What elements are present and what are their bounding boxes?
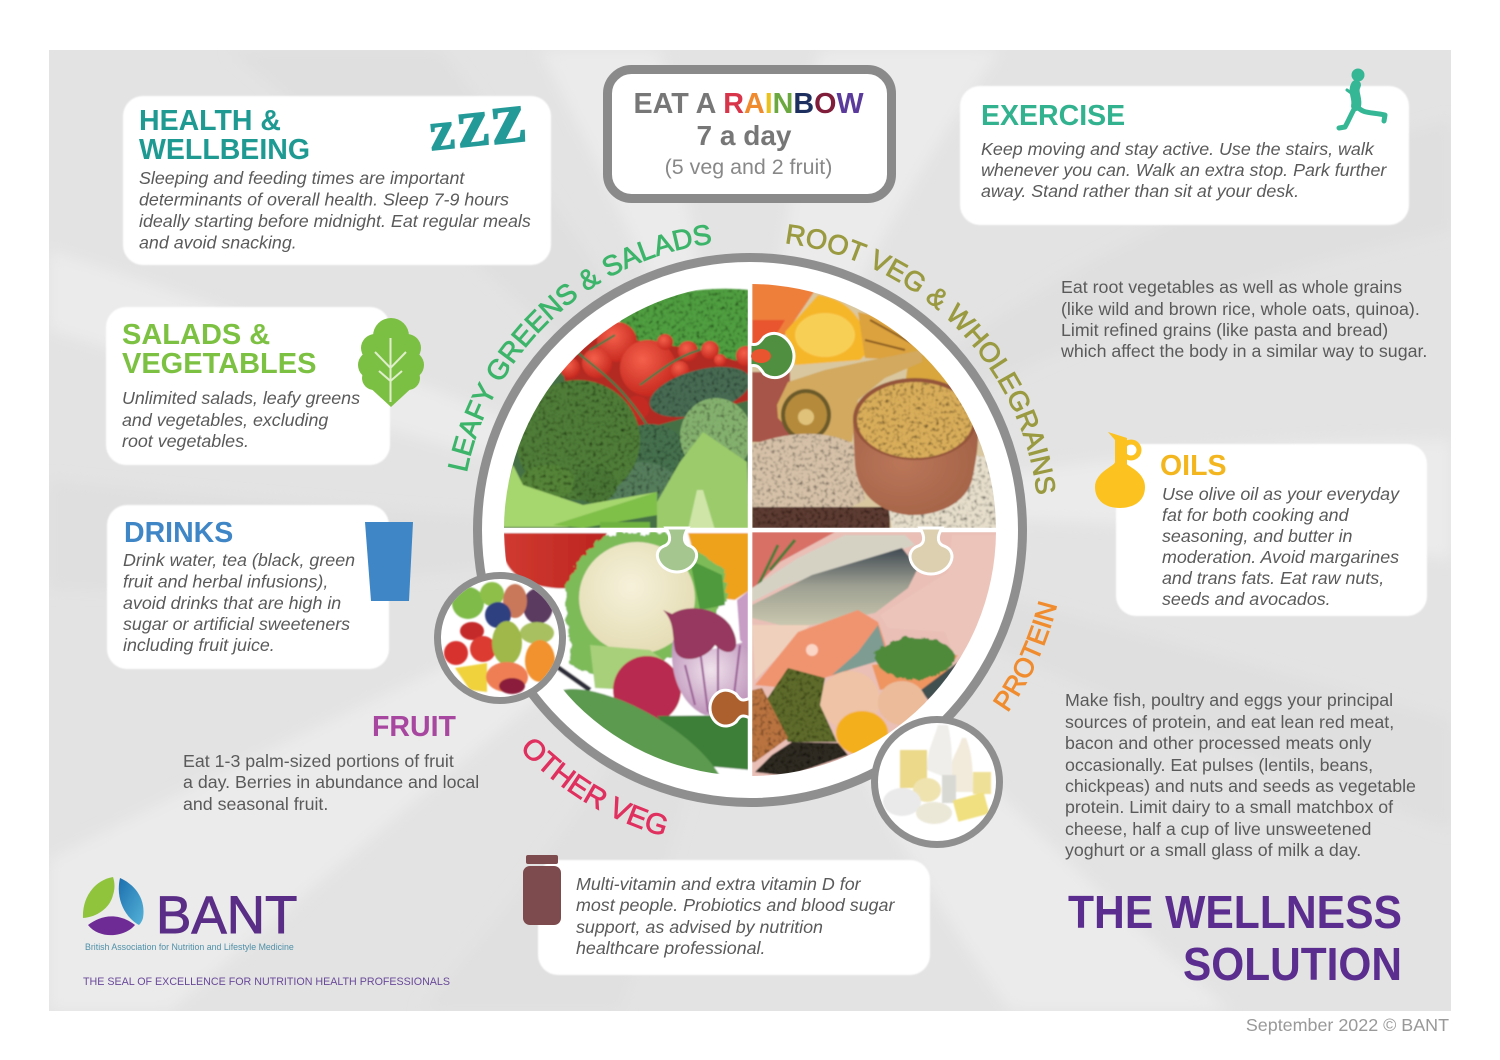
text: supplement advice: Multi-vitamin and extra vitamin D for xyxy=(576,874,862,894)
text: root vegetables advice: Eat root vegetables as well as whole grains xyxy=(1061,277,1402,297)
text: protein advice: occasionally. Eat pulses (lentils, beans, xyxy=(1065,755,1373,775)
text: sleep advice: Sleeping and feeding times are important xyxy=(139,168,465,188)
quadrant: other veg xyxy=(500,530,750,780)
panel: drinks xyxy=(107,505,413,669)
curved label: root veg and wholegrains: ROOT VEG & WHOLEGRAINS xyxy=(786,224,1056,494)
text: oils advice: Use olive oil as your everyday xyxy=(1162,484,1400,504)
text: oils advice: and trans fats. Eat raw nuts, xyxy=(1162,568,1384,588)
text: drinks advice: Drink water, tea (black, green xyxy=(123,550,355,570)
text: sleep advice: determinants of overall health. Sleep 7-9 hours xyxy=(139,190,509,210)
text: oils advice: moderation. Avoid margarines xyxy=(1162,547,1399,567)
icon: supplement bottle xyxy=(523,855,561,925)
icon: sleeping zzz: Z xyxy=(428,115,457,159)
text: exercise advice: Keep moving and stay active. Use the stairs, walk xyxy=(981,139,1375,159)
text: seal of excellence: THE SEAL OF EXCELLENCE FOR NUTRITION HEALTH PROFESSIONALS xyxy=(83,976,450,988)
curved label: other veg: OTHER VEG xyxy=(524,739,667,834)
icon: three leaf emblem xyxy=(83,877,144,935)
text: protein advice: Make fish, poultry and eggs your principal xyxy=(1065,690,1393,710)
text: supplement advice: most people. Probiotics and blood sugar xyxy=(576,895,895,915)
text: protein advice: bacon and other processed meats only xyxy=(1065,733,1372,753)
title: the wellness solution xyxy=(1068,886,1402,990)
text: exercise advice: whenever you can. Walk an extra stop. Park further xyxy=(981,160,1387,180)
heading: 7 a day: 7 a day xyxy=(697,120,792,151)
text: veg and fruit split: (5 veg and 2 fruit) xyxy=(665,155,832,179)
icon: sleeping zzz xyxy=(428,96,529,159)
text: supplement advice: healthcare professional. xyxy=(576,938,765,958)
text: root vegetables advice: Limit refined grains (like pasta and bread) xyxy=(1061,320,1388,340)
text: drinks advice: including fruit juice. xyxy=(123,635,275,655)
text: salads advice: and vegetables, excluding xyxy=(122,410,328,430)
text: oils advice: seasoning, and butter in xyxy=(1162,526,1353,546)
heading: salads and vegetables: VEGETABLES xyxy=(122,348,316,380)
tab: other veg jigsaw piece xyxy=(657,528,697,572)
icon: leaf xyxy=(358,318,424,407)
text: root vegetables advice: (like wild and brown rice, whole oats, quinoa). xyxy=(1061,299,1420,319)
panel: salads and vegetables xyxy=(106,307,424,465)
heading: eat a rainbow: EAT A RAINBOW xyxy=(633,88,864,120)
jigsaw dividers xyxy=(503,282,997,778)
text: fruit advice: Eat 1-3 palm-sized portions of fruit xyxy=(183,751,454,771)
heading: salads and vegetables: SALADS & xyxy=(122,319,270,351)
text: protein advice: chickpeas) and nuts and seeds as vegetable xyxy=(1065,776,1416,796)
tab: wholegrain jigsaw piece xyxy=(910,528,952,574)
heading: oils: OILS xyxy=(1160,450,1227,482)
text: protein advice: cheese, half a cup of live unsweetened xyxy=(1065,819,1371,839)
tab: leafy jigsaw piece xyxy=(750,333,794,378)
text: exercise advice: away. Stand rather than sit at your desk. xyxy=(981,181,1299,201)
text: fruit advice: and seasonal fruit. xyxy=(183,794,328,814)
heading: health and wellbeing: WELLBEING xyxy=(139,134,310,166)
chart: food plate xyxy=(478,258,1022,802)
quadrant: root veg and wholegrains xyxy=(750,280,1002,530)
dairy circle xyxy=(874,720,1000,844)
panel: health and wellbeing xyxy=(123,96,551,265)
icon: glass of water xyxy=(365,522,413,601)
text: drinks advice: sugar or artificial sweeteners xyxy=(123,614,350,634)
heading: exercise: EXERCISE xyxy=(981,100,1125,132)
text: protein advice: sources of protein, and eat lean red meat, xyxy=(1065,712,1394,732)
text: sleep advice: ideally starting before midnight. Eat regular meals xyxy=(139,211,531,231)
text: drinks advice: fruit and herbal infusions), xyxy=(123,572,328,592)
text: date and copyright: September 2022 © BANT xyxy=(1246,1015,1449,1035)
quadrant: protein xyxy=(745,530,1002,782)
logo: BANT xyxy=(83,877,297,952)
text: root vegetables advice: which affect the body in a similar way to sugar. xyxy=(1060,341,1427,361)
title: the wellness solution: THE WELLNESS xyxy=(1068,886,1402,938)
text: salads advice: Unlimited salads, leafy greens xyxy=(122,388,360,408)
curved label: protein: PROTEIN xyxy=(992,601,1058,712)
text: BANT wordmark: BANT xyxy=(156,886,297,945)
curved label: leafy greens and salads: LEAFY GREENS & SALADS xyxy=(448,224,711,472)
tab: lentil jigsaw piece xyxy=(710,690,750,726)
text: supplement advice: support, as advised by nutrition xyxy=(576,917,823,937)
panel: exercise xyxy=(960,68,1409,225)
heading: drinks: DRINKS xyxy=(124,517,233,549)
icon: runner xyxy=(1339,68,1385,128)
text: oils advice: seeds and avocados. xyxy=(1162,589,1331,609)
text: protein advice: yoghurt or a small glass of milk a day. xyxy=(1065,840,1361,860)
text: salads advice: root vegetables. xyxy=(122,431,249,451)
panel: supplements xyxy=(523,855,930,975)
text: oils advice: fat for both cooking and xyxy=(1162,505,1350,525)
text: fruit advice: a day. Berries in abundance and local xyxy=(183,772,479,792)
callout: eat a rainbow xyxy=(608,70,892,198)
text: sleep advice: and avoid snacking. xyxy=(139,232,297,252)
fruit circle xyxy=(438,576,562,700)
icon: sleeping zzz: Z xyxy=(488,96,529,156)
heading: fruit: FRUIT xyxy=(372,711,456,743)
text: organisation name: British Association for Nutrition and Lifestyle Medicine xyxy=(85,942,294,952)
quadrant: leafy greens xyxy=(500,289,756,530)
text: drinks advice: avoid drinks that are high in xyxy=(123,593,341,613)
title: the wellness solution: SOLUTION xyxy=(1183,938,1402,990)
dairy image xyxy=(883,725,991,824)
text: protein advice: protein. Limit dairy to a small matchbox of xyxy=(1065,797,1393,817)
heading: health and wellbeing: HEALTH & xyxy=(139,105,281,137)
plate ring xyxy=(478,258,1022,802)
panel: oils xyxy=(1095,432,1427,616)
fruit image xyxy=(444,582,555,694)
icon: oil jug xyxy=(1095,432,1145,508)
icon: sleeping zzz: Z xyxy=(455,102,492,158)
